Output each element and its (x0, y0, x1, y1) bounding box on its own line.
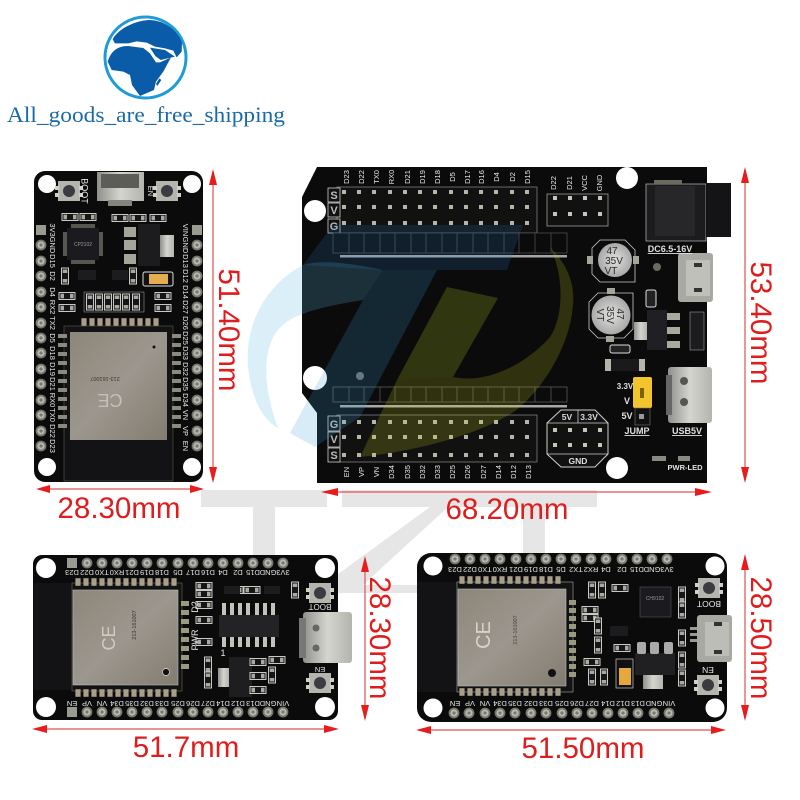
board 1: ESP32 with micro USB (portrait) (34, 171, 203, 482)
pin labels: RX0 (48, 393, 57, 407)
silkscreen labels (356, 244, 703, 472)
top header labels (342, 170, 604, 191)
dimension: 28.30mm height arrow (board 3): 28.30mm (363, 577, 396, 699)
top header labels: D16 (477, 170, 486, 184)
top header labels: D5 (448, 172, 457, 182)
pin labels: D26 (186, 699, 200, 708)
capacitor 1: 47 (606, 246, 618, 257)
pin labels: D19 (524, 565, 538, 574)
pin labels: GND (643, 565, 660, 574)
jumper (633, 377, 652, 425)
pin labels: D5 (556, 565, 566, 574)
pin labels: D17 (186, 568, 200, 577)
bottom header labels: D33 (433, 465, 442, 479)
bottom header labels: D14 (494, 465, 503, 479)
pin labels: D27 (201, 699, 215, 708)
pin labels: D4 (48, 287, 57, 297)
pin labels: D14 (181, 285, 190, 299)
module (417, 576, 576, 696)
pin labels: EN (181, 441, 190, 451)
pin labels: GND (259, 568, 276, 577)
pin labels: D35 (508, 699, 522, 708)
pin labels: D14 (601, 699, 615, 708)
module: CE (99, 625, 119, 651)
logo text: All_goods_are_free_shipping (7, 102, 285, 127)
pin labels: D34 (181, 393, 190, 407)
watermark: grey TZT letters (201, 490, 597, 602)
USB, buttons, chips (55, 172, 181, 312)
capacitor 2: 47 (614, 308, 625, 320)
pin labels: RX2 (584, 565, 598, 574)
pin labels: VIN (277, 699, 289, 708)
pin labels: D23 (448, 565, 462, 574)
bottom header labels: D34 (387, 465, 396, 479)
pin labels: D34 (493, 699, 507, 708)
pin labels: D33 (539, 699, 553, 708)
pin labels (448, 565, 721, 708)
pin labels: VN (181, 410, 190, 420)
board 4: ESP32 with micro USB (landscape) (417, 553, 732, 722)
dimension: 51.50mm width arrow (416, 726, 726, 765)
dimension: 68.20mm width arrow: 68.20mm (446, 493, 568, 526)
top SVG header block: S (330, 190, 338, 202)
pin labels: D13 (246, 699, 260, 708)
pin labels: D19 (140, 568, 154, 577)
pin labels: D19 (48, 362, 57, 376)
silkscreen labels: V (624, 396, 630, 406)
top SVG header block: V (330, 205, 338, 217)
pin labels: D12 (616, 699, 630, 708)
pin labels: EN (702, 665, 714, 675)
pin labels: GND (259, 699, 276, 708)
pin labels: TX0 (95, 568, 109, 577)
silkscreen labels: DC6.5-16V (648, 244, 692, 254)
antenna and ESP32 module: CE (97, 390, 123, 410)
module: 213-161007 (132, 610, 138, 640)
pin labels: D5 (48, 333, 57, 343)
bottom header labels: D27 (479, 465, 488, 479)
pin labels: RX0 (493, 565, 507, 574)
capacitor 1: 35V (605, 256, 623, 267)
dimension: 51.40mm height arrow (209, 169, 245, 483)
header pins (36, 225, 202, 451)
pin labels: D25 (555, 699, 569, 708)
capacitor 1 (587, 240, 639, 282)
chip, regulator, parts: CH9102 (646, 596, 664, 602)
silkscreen labels: JUMP (624, 426, 650, 436)
pin labels: D35 (125, 699, 139, 708)
pin labels: 3V3 (660, 565, 674, 574)
silkscreen labels: PWR-LED (668, 463, 703, 472)
pin labels: 3V3 (276, 568, 290, 577)
lower socket strip (333, 387, 567, 408)
bottom GVS header block: S (330, 450, 338, 462)
logo: globe (105, 17, 186, 98)
pin labels: D15 (630, 565, 644, 574)
pin labels: D18 (539, 565, 553, 574)
pin labels: D22 (80, 568, 94, 577)
SOIC chip, regulator, parts: D2 (190, 601, 200, 613)
pin labels: D15 (48, 254, 57, 268)
top header labels: D18 (433, 170, 442, 184)
top header labels: D4 (492, 172, 501, 182)
pin labels: TX0 (478, 565, 492, 574)
pin labels: D2 (617, 565, 627, 574)
pin labels: GND (48, 237, 57, 254)
pin labels: VP (465, 699, 475, 708)
antenna and ESP32 module: 213-161007 (90, 375, 120, 381)
pin labels: D21 (48, 377, 57, 391)
pin labels: EN (450, 699, 460, 708)
dimension: 28.50mm height arrow (board 4) (741, 554, 777, 721)
top SVG header block: G (330, 221, 338, 233)
pin labels: EN (315, 665, 325, 674)
bottom GVS header block: G (330, 419, 338, 431)
pin labels: 3V3 (48, 223, 57, 237)
pin labels: D13 (631, 699, 645, 708)
power header with 5V, 3.3V, GND (547, 410, 608, 467)
USB, buttons, chips: CP2102 (74, 242, 92, 248)
module: 213-161007 (513, 615, 519, 645)
pin labels: D16 (201, 568, 215, 577)
pin labels: D35 (181, 377, 190, 391)
bottom header labels: D12 (509, 465, 518, 479)
USB, buttons (690, 578, 732, 695)
header pins (449, 554, 674, 718)
power header with 5V, 3.3V, GND: 3.3V (580, 412, 598, 422)
top header labels: D22 (549, 176, 558, 190)
pin labels: D12 (181, 269, 190, 283)
pin labels: D32 (181, 362, 190, 376)
capacitor 1: VT (605, 266, 617, 277)
pin labels: D27 (585, 699, 599, 708)
pin labels: D13 (181, 254, 190, 268)
pin labels: D18 (48, 346, 57, 360)
bottom GVS header block (328, 415, 537, 462)
dimension: 53.40mm height arrow: 53.40mm (744, 262, 777, 384)
module (34, 578, 189, 697)
pin labels: D33 (155, 699, 169, 708)
pin labels: D22 (463, 565, 477, 574)
SOIC chip, regulator, parts: 1 (220, 648, 226, 658)
capacitor 2: 35V (604, 306, 615, 324)
pin labels: D23 (65, 568, 79, 577)
bottom header labels: VP (357, 467, 366, 477)
dimension: 28.30mm width arrow (36, 485, 204, 525)
pin labels: VP (181, 426, 190, 436)
pin labels: BOOT (309, 602, 331, 611)
silkscreen labels: 5V (621, 411, 633, 421)
dimension: 68.20mm width arrow (321, 488, 712, 526)
pin labels: TX2 (48, 316, 57, 330)
top header labels: RX0 (387, 170, 396, 184)
top header labels: VCC (580, 175, 589, 191)
dimension: 51.7mm width arrow: 51.7mm (133, 731, 239, 764)
pin labels: GND (645, 699, 662, 708)
pin labels: VIN (181, 224, 190, 236)
pin labels: EN (146, 186, 155, 196)
top header labels: D17 (463, 170, 472, 184)
pin labels: D18 (155, 568, 169, 577)
pin labels: D15 (246, 568, 260, 577)
pin labels: TX0 (48, 408, 57, 422)
bottom header labels: D35 (403, 465, 412, 479)
silkscreen labels: USB5V (672, 426, 702, 436)
top header labels: D22 (357, 170, 366, 184)
pin labels: D26 (181, 316, 190, 330)
pin labels: D27 (181, 300, 190, 314)
pin labels: VP (82, 699, 92, 708)
power header with 5V, 3.3V, GND: GND (569, 456, 587, 466)
USB-C connector (666, 367, 712, 423)
pin labels: VIN (663, 699, 675, 708)
dimension: 53.40mm height arrow (741, 167, 777, 483)
dimension: 51.7mm width arrow (32, 725, 339, 764)
pin labels: D4 (218, 568, 228, 577)
top header labels: TX0 (372, 170, 381, 184)
dimension: 28.30mm width arrow: 28.30mm (58, 492, 180, 525)
header pins (67, 558, 288, 717)
top SVG header block (328, 187, 537, 233)
top header labels: D2 (508, 172, 517, 182)
bottom GVS header block: V (330, 434, 338, 446)
pin labels: RX2 (48, 300, 57, 314)
SOIC chip, regulator, parts: PWR (190, 629, 200, 650)
top header labels: GND (595, 174, 604, 191)
upper socket strip (333, 233, 567, 258)
power header with 5V, 3.3V, GND: 5V (562, 412, 573, 422)
pin labels: D21 (125, 568, 139, 577)
top header labels: D21 (565, 176, 574, 190)
pin labels: D23 (48, 439, 57, 453)
top header labels: D19 (418, 170, 427, 184)
pin labels: D33 (181, 346, 190, 360)
top header labels: D21 (403, 170, 412, 184)
pin labels: TX2 (569, 565, 583, 574)
bottom header labels: D25 (448, 465, 457, 479)
bottom header labels (342, 465, 533, 479)
dimension: 28.50mm height arrow (board 4): 28.50mm (744, 577, 777, 699)
module: CE (473, 621, 495, 649)
pin labels: D21 (509, 565, 523, 574)
top header labels: D15 (523, 170, 532, 184)
silkscreen labels: 3.3V (617, 382, 634, 391)
pin labels: D22 (48, 424, 57, 438)
pin labels: D25 (181, 331, 190, 345)
SOIC chip, regulator, parts (190, 582, 298, 697)
bottom header labels: EN (342, 467, 351, 477)
bottom header labels: D26 (463, 465, 472, 479)
pin labels (65, 568, 331, 708)
capacitor 2 (589, 288, 633, 342)
dimension: 51.40mm height arrow: 51.40mm (212, 269, 245, 391)
micro USB (678, 253, 713, 302)
top header labels: D23 (342, 170, 351, 184)
pin labels: D4 (601, 565, 611, 574)
pin labels: D34 (110, 699, 124, 708)
pin labels: VN (97, 699, 107, 708)
pin labels: BOOT (697, 599, 721, 609)
pin labels: D32 (140, 699, 154, 708)
pin labels: D32 (524, 699, 538, 708)
bottom header labels: D32 (418, 465, 427, 479)
pin labels: GND (181, 237, 190, 254)
pin labels: D5 (173, 568, 183, 577)
antenna and ESP32 module (58, 318, 181, 481)
pin labels: D14 (216, 699, 230, 708)
pin labels: VN (480, 699, 490, 708)
chip, regulator, parts (582, 582, 686, 689)
pin labels (48, 178, 190, 453)
pin labels: D2 (233, 568, 243, 577)
board 2: expansion shield (302, 167, 731, 483)
regulator (605, 290, 704, 371)
pin labels: D12 (231, 699, 245, 708)
pin labels: D2 (48, 271, 57, 281)
bottom header labels: VN (372, 467, 381, 477)
pin labels: RX0 (110, 568, 124, 577)
capacitor 2: VT (594, 309, 605, 321)
USB-C and buttons (299, 583, 352, 693)
pin labels: EN (67, 699, 77, 708)
pin labels: D25 (171, 699, 185, 708)
pin labels: D26 (570, 699, 584, 708)
pin labels: BOOT (80, 178, 90, 204)
bottom header labels: D13 (524, 465, 533, 479)
DC jack (646, 180, 731, 241)
dimension: 51.50mm width arrow: 51.50mm (522, 732, 644, 765)
small 4x2 header top (547, 194, 608, 226)
board 3: ESP32 with USB-C (landscape) (33, 555, 352, 720)
watermark: blue and yellow logo overlay (248, 225, 573, 457)
